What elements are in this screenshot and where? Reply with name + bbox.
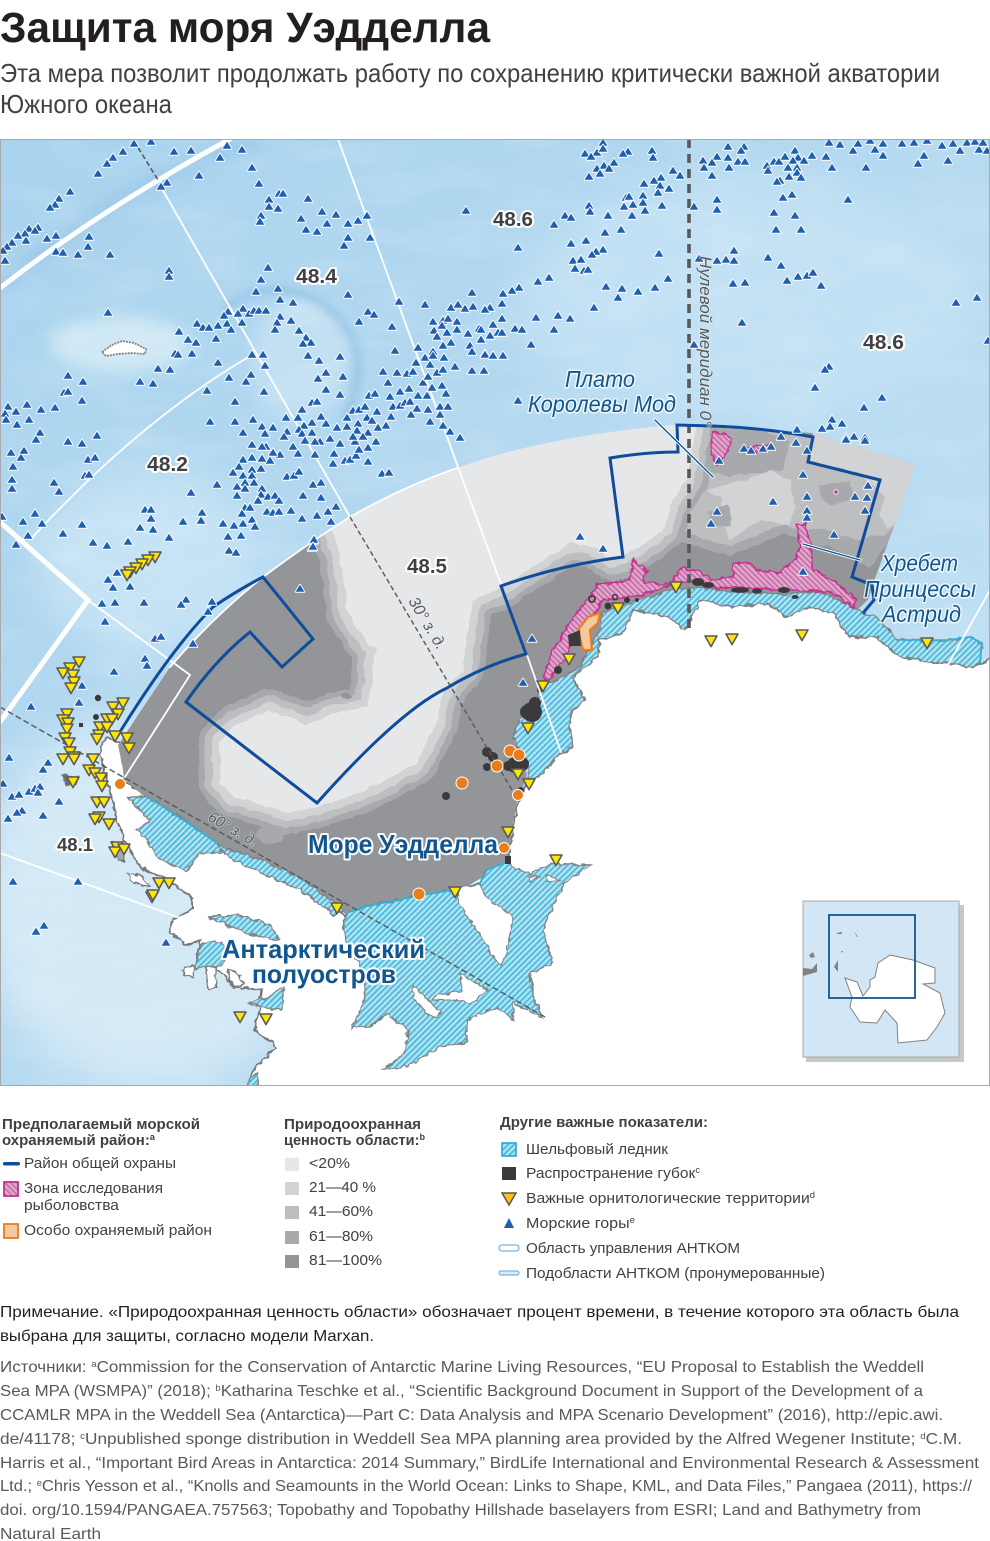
research fishing zone xyxy=(542,430,858,680)
meridian lines xyxy=(0,139,689,1017)
legend: other important indicators: Область управления АНТКОМ xyxy=(526,1240,740,1257)
sources: Harris et al., “Important Bird Areas in Antarctica: 2014 Summary,” BirdLife International and Environmental Research & Assessment xyxy=(0,1455,980,1472)
sponge distribution xyxy=(79,578,798,864)
panel: map of the Weddell Sea xyxy=(0,139,990,1096)
Antarctic land xyxy=(100,600,990,1096)
Peninsula islands xyxy=(62,775,244,990)
sources: C.M. xyxy=(926,1431,962,1448)
specially protected area xyxy=(578,613,600,650)
ice rises xyxy=(413,875,560,1018)
general protection zone boundary xyxy=(115,425,880,803)
sources: d xyxy=(920,1431,926,1441)
place labels: Королевы Мод xyxy=(528,391,676,417)
place labels xyxy=(222,366,976,989)
legend: proposed marine protected area: рыболовства xyxy=(24,1197,120,1214)
legend: proposed marine protected area xyxy=(2,1117,212,1239)
subarea labels: 48.4 xyxy=(296,266,338,288)
subarea labels: 48.6 xyxy=(493,209,533,231)
legend: conservation value xyxy=(284,1117,426,1269)
sources: de/41178; xyxy=(0,1431,70,1448)
legend: conservation value: 81—100% xyxy=(309,1252,382,1269)
sources: e xyxy=(37,1478,42,1488)
legend: proposed marine protected area: Предполагаемый морской xyxy=(2,1117,200,1133)
place labels: Плато xyxy=(565,366,635,392)
legend: proposed marine protected area: Район общей охраны xyxy=(24,1155,176,1172)
meridian labels xyxy=(205,256,715,850)
place labels: Хребет xyxy=(880,550,958,576)
legend: conservation value: b xyxy=(419,1132,426,1142)
sources: Commission for the Conservation of Antarctic Marine Living Resources, “EU Proposal to Establish the Weddell xyxy=(97,1359,924,1376)
subarea labels: 48.1 xyxy=(57,835,93,855)
place labels: Море Уэдделла xyxy=(308,829,499,859)
legend: conservation value: ценность области: xyxy=(284,1133,419,1149)
place labels: Антарктический xyxy=(222,934,425,964)
legend: conservation value: <20% xyxy=(309,1155,350,1172)
legend: proposed marine protected area: Особо охраняемый район xyxy=(24,1222,212,1239)
place labels: Принцессы xyxy=(864,576,976,602)
sources: Источники: xyxy=(0,1359,82,1376)
note: выбрана для защиты, согласно модели Marxan. xyxy=(0,1328,374,1345)
subarea labels: 48.6 xyxy=(863,332,904,354)
sources xyxy=(0,1359,980,1541)
leader lines xyxy=(655,420,860,560)
title: Защита моря Уэдделла xyxy=(0,4,491,52)
seamounts xyxy=(2,141,988,943)
legend: conservation value: 61—80% xyxy=(309,1228,373,1245)
sources: Chris Yesson et al., “Knolls and Seamounts in the World Ocean: Links to Shape, KML, and Data Files,” Pangaea (2011), https:// xyxy=(42,1478,973,1495)
subtitle: Южного океана xyxy=(0,89,172,119)
conservation value zones xyxy=(118,400,920,915)
sources: b xyxy=(215,1383,221,1393)
sources: Unpublished sponge distribution in Weddell Sea MPA planning area provided by the Alfred Wegener Institute; xyxy=(85,1431,920,1448)
sources: Ltd.; xyxy=(0,1478,31,1495)
note: Примечание. «Природоохранная ценность области» обозначает процент времени, в течение которого эта область была xyxy=(0,1304,959,1321)
legend: other important indicators: Важные орнитологические территории xyxy=(526,1190,796,1207)
sources: Sea MPA (WSMPA)” (2018); xyxy=(0,1383,200,1400)
important bird areas xyxy=(63,557,927,1019)
main value zones xyxy=(220,400,700,813)
South Georgia island xyxy=(102,341,146,356)
subarea labels xyxy=(57,209,904,855)
legend: other important indicators: c xyxy=(695,1165,701,1175)
sites of special protection xyxy=(114,745,525,900)
legend: proposed marine protected area: охраняемый район: xyxy=(2,1133,145,1149)
legend: other important indicators xyxy=(499,1115,825,1282)
east value zone xyxy=(655,415,920,568)
sources: a xyxy=(91,1359,97,1369)
legend: proposed marine protected area: a xyxy=(150,1132,156,1142)
legend: conservation value: 41—60% xyxy=(309,1203,373,1220)
inset locator map xyxy=(803,901,964,1062)
subarea labels: 48.2 xyxy=(147,454,188,476)
subarea labels: 48.5 xyxy=(407,556,447,578)
meridian labels: Нулевой меридиан 0° xyxy=(696,256,715,427)
meridian labels: 30° з. д. xyxy=(405,594,449,653)
sources: c xyxy=(80,1431,86,1441)
sources: CCAMLR MPA in the Weddell Sea (Antarctica)—Part C: Data Analysis and MPA Scenario Development” (2016), http://epic.awi. xyxy=(0,1407,943,1424)
legend: other important indicators: Морские горы xyxy=(526,1215,623,1232)
meridian labels: 60° з. д. xyxy=(205,809,260,850)
sources: Katharina Teschke et al., “Scientific Background Document in Support of the Development of a xyxy=(221,1383,923,1400)
legend: proposed marine protected area: Зона исследования xyxy=(24,1180,163,1197)
CCAMLR area and subarea boundaries xyxy=(0,139,990,919)
legend: other important indicators: e xyxy=(630,1215,635,1225)
ice shelves xyxy=(126,586,984,1085)
place labels: Астрид xyxy=(880,601,961,627)
legend: other important indicators: Подобласти АНТКОМ (пронумерованные) xyxy=(526,1265,825,1282)
legend: other important indicators: Распространение губок xyxy=(526,1165,690,1182)
legend: conservation value: Природоохранная xyxy=(284,1117,421,1133)
sources: doi. org/10.1594/PANGAEA.757563; Topobathy and Topobathy Hillshade baselayers from ESRI; Land and Bathymetry from xyxy=(0,1502,921,1519)
place labels: полуостров xyxy=(252,959,396,989)
legend: other important indicators: Другие важные показатели: xyxy=(500,1115,708,1131)
legend: conservation value: 21—40 % xyxy=(309,1179,376,1196)
legend: other important indicators: d xyxy=(810,1190,815,1200)
legend: other important indicators: Шельфовый ледник xyxy=(526,1141,668,1158)
